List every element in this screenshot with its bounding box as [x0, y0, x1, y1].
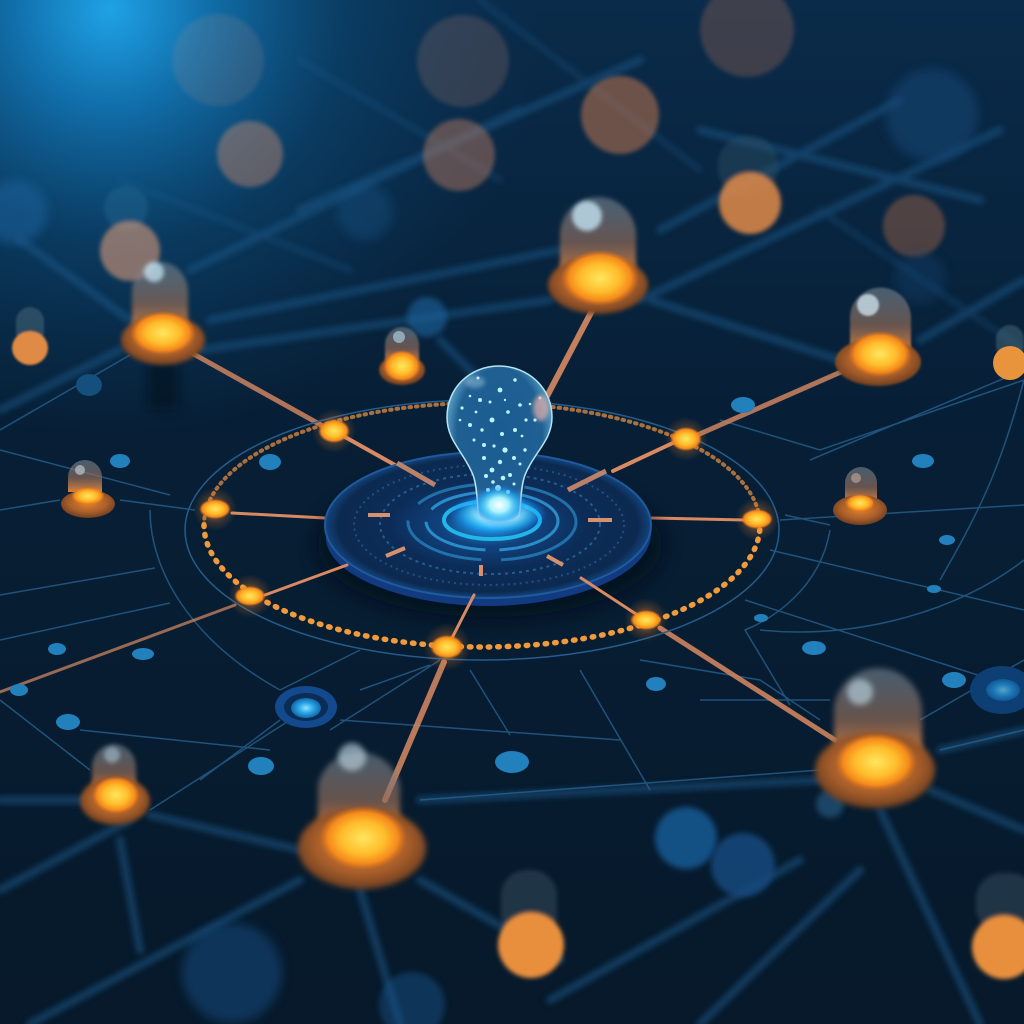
lamp node: lower left small — [80, 744, 150, 825]
blurred lamp: bottom right — [972, 873, 1024, 979]
connector lines over platform edge — [265, 565, 636, 638]
ring glow nodes — [193, 409, 779, 671]
lamp node: lower right — [815, 668, 935, 808]
thin circuit lines — [0, 355, 1024, 810]
platform tick marks — [368, 463, 612, 576]
blurred background network lines — [0, 0, 1024, 410]
lamp node: small right — [833, 467, 887, 525]
blue ring node: lower left — [275, 686, 337, 728]
blurred lamp: top right — [718, 136, 781, 234]
concentric platform rings — [354, 465, 624, 585]
blue ring node: right edge — [970, 666, 1024, 714]
small blue dots — [10, 374, 966, 775]
bulb sparkles — [459, 376, 542, 494]
lamp node: upper right — [835, 287, 921, 386]
lamp node: lower centre-left — [298, 743, 426, 889]
lamp node: small upper centre — [379, 327, 425, 385]
lamp node: left edge — [12, 307, 48, 365]
network connector lines behind platform — [0, 305, 850, 800]
central glow — [448, 492, 548, 536]
light bulb — [447, 366, 552, 526]
blurred lamp: bottom center — [498, 870, 564, 978]
lamp node: small left — [61, 460, 115, 518]
lamp node: right edge — [993, 325, 1024, 380]
central platform — [318, 452, 662, 617]
lamp node: top centre — [548, 197, 648, 314]
blurred lamp: top left — [100, 186, 160, 281]
outer ring — [185, 400, 779, 660]
lamp node: upper left — [121, 262, 205, 410]
blurred foreground network lines — [0, 730, 1024, 1024]
